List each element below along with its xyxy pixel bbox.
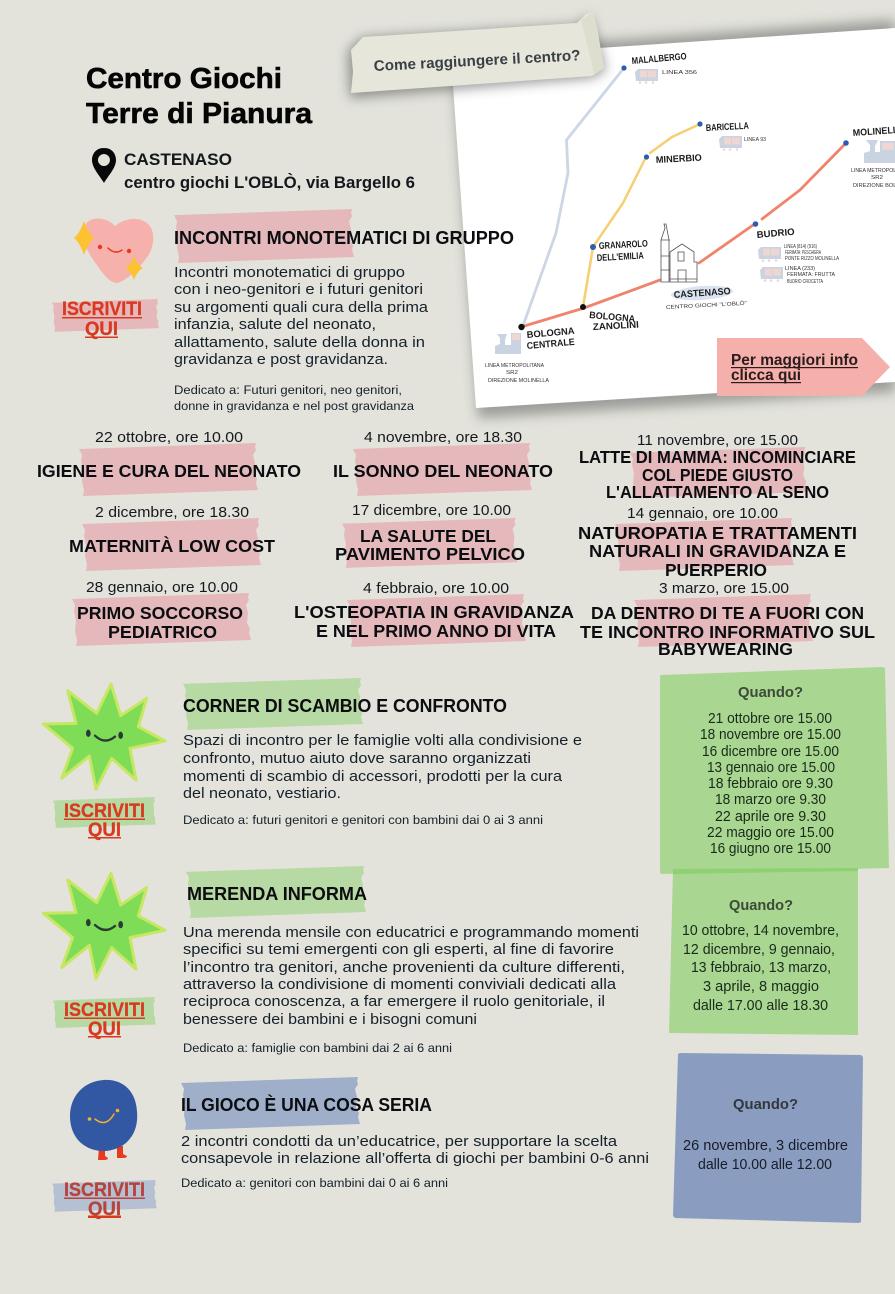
link: iscriviti qui: ISCRIVITI bbox=[64, 801, 145, 822]
event: maternità low cost bbox=[69, 504, 275, 571]
card: quando corner bbox=[660, 667, 889, 874]
card: quando corner: 22 aprile ore 9.30 bbox=[715, 809, 826, 825]
event: il sonno: IL SONNO DEL NEONATO bbox=[333, 461, 553, 481]
description bbox=[174, 264, 429, 368]
tape label: Come raggiungere il centro? bbox=[348, 12, 606, 98]
event: babywearing: TE INCONTRO INFORMATIVO SUL bbox=[580, 622, 875, 642]
map: church illustration bbox=[661, 224, 697, 282]
event: latte di mamma: LATTE DI MAMMA: INCOMINCIARE bbox=[579, 447, 856, 467]
map: hand-written labels: LINEA 356 bbox=[662, 70, 697, 76]
description: specifici su temi emergenti con gli esperti, al fine di favorire bbox=[183, 941, 614, 958]
map: hand-written labels: CENTRO GIOCHI "L'OBLÒ" bbox=[666, 300, 747, 311]
description: Spazi di incontro per le famiglie volti alla condivisione e bbox=[183, 732, 582, 749]
event: naturopatia bbox=[578, 505, 857, 580]
card: quando merenda bbox=[669, 868, 858, 1035]
heading: MERENDA INFORMA bbox=[187, 884, 367, 904]
map: hand-written labels: BOLOGNA bbox=[526, 326, 575, 341]
event: osteopatia bbox=[294, 580, 574, 647]
description: 2 incontri condotti da un’educatrice, per supportare la scelta bbox=[181, 1133, 618, 1150]
heading bbox=[183, 678, 507, 730]
event: pavimento pelvico: PAVIMENTO PELVICO bbox=[335, 544, 525, 564]
link: iscriviti qui: ISCRIVITI bbox=[62, 299, 142, 320]
icon: green star bbox=[43, 684, 165, 789]
event: naturopatia: 14 gennaio, ore 10.00 bbox=[627, 505, 778, 522]
map: hand-written labels: FERMATA: PESCHIERA bbox=[785, 250, 821, 256]
address: CASTENASO bbox=[124, 151, 232, 169]
event: naturopatia: NATURALI IN GRAVIDANZA E bbox=[589, 541, 846, 561]
card: quando merenda: dalle 17.00 alle 18.30 bbox=[693, 998, 828, 1014]
event: maternità low cost: 2 dicembre, ore 18.30 bbox=[95, 504, 249, 521]
map: hand-written labels: LINEA 93 bbox=[744, 137, 766, 143]
event: babywearing bbox=[580, 580, 875, 659]
button: Per maggiori info: clicca qui bbox=[731, 367, 801, 384]
event: latte di mamma: L'ALLATTAMENTO AL SENO bbox=[606, 482, 829, 502]
map: highlight behind Castenaso bbox=[671, 284, 733, 302]
link: iscriviti qui: ISCRIVITI bbox=[64, 1000, 145, 1021]
icon: location pin bbox=[92, 148, 116, 183]
card: quando merenda: Quando? bbox=[729, 898, 793, 914]
event: osteopatia: E NEL PRIMO ANNO DI VITA bbox=[316, 621, 556, 641]
map: hand-written labels: DELL'EMILIA bbox=[597, 251, 644, 264]
card: quando corner: Quando? bbox=[738, 685, 803, 701]
link: iscriviti qui: ISCRIVITI bbox=[64, 1180, 145, 1201]
description bbox=[183, 924, 639, 1028]
audience note: donne in gravidanza e nel post gravidanza bbox=[174, 399, 414, 413]
map: hand-written labels: SR2 bbox=[871, 175, 883, 181]
event: latte di mamma: COL PIEDE GIUSTO bbox=[642, 465, 793, 485]
audience note: Dedicato a: futuri genitori e genitori con bambini dai 0 ai 3 anni bbox=[183, 813, 543, 827]
event: pavimento pelvico: LA SALUTE DEL bbox=[360, 526, 496, 546]
description: con i neo-genitori e i futuri genitori bbox=[174, 281, 423, 298]
icon: green star bbox=[43, 873, 165, 979]
map: hand-written labels: BUDRIO CROCETTA bbox=[787, 279, 823, 285]
map: blue line to Malalbergo bbox=[524, 68, 624, 323]
audience note: Dedicato a: Futuri genitori, neo genitori, bbox=[174, 383, 402, 397]
card: quando gioco bbox=[673, 1053, 863, 1223]
heading bbox=[181, 1077, 432, 1130]
event: igiene e cura bbox=[37, 429, 301, 496]
card: quando merenda: 3 aprile, 8 maggio bbox=[703, 979, 819, 995]
description: momenti di scambio di accessori, prodotti per la cura bbox=[183, 768, 563, 785]
link: iscriviti qui: QUI bbox=[85, 319, 118, 340]
map: train icons bbox=[495, 69, 895, 354]
event: latte di mamma bbox=[579, 432, 856, 502]
description: allattamento, salute della donna in bbox=[174, 334, 425, 351]
map: hand-written labels: SR2 bbox=[506, 370, 518, 376]
address bbox=[124, 151, 415, 192]
card: quando corner: 18 febbraio ore 9.30 bbox=[708, 776, 833, 792]
event: primo soccorso bbox=[72, 579, 251, 646]
card: quando corner: 21 ottobre ore 15.00 bbox=[708, 711, 832, 727]
card: quando corner: 13 gennaio ore 15.00 bbox=[707, 760, 835, 776]
event: igiene e cura: 22 ottobre, ore 10.00 bbox=[95, 429, 243, 446]
button: Per maggiori info: Per maggiori info bbox=[731, 352, 858, 369]
description: benessere dei bambini e i bisogni comuni bbox=[183, 1011, 477, 1028]
card: quando gioco: dalle 10.00 alle 12.00 bbox=[698, 1157, 832, 1173]
map: hand-written labels bbox=[485, 51, 895, 384]
title: Terre di Pianura bbox=[86, 98, 313, 130]
card: quando corner: 18 novembre ore 15.00 bbox=[700, 727, 841, 743]
tape label: Come raggiungere il centro?: Come raggiungere il centro? bbox=[373, 47, 581, 75]
event: babywearing: DA DENTRO DI TE A FUORI CON bbox=[591, 603, 864, 623]
address: centro giochi L'OBLÒ, via Bargello 6 bbox=[124, 173, 415, 192]
button: Per maggiori info bbox=[717, 338, 890, 396]
audience note: Dedicato a: famiglie con bambini dai 2 ai 6 anni bbox=[183, 1041, 452, 1055]
map: hand-written labels: LINEA (814) (916) bbox=[784, 244, 817, 250]
map: hand-written labels: PONTE RIZZO MOLINELLA bbox=[785, 256, 839, 262]
description: confronto, mutuo aiuto dove saranno organizzati bbox=[183, 750, 531, 767]
card: quando merenda: 12 dicembre, 9 gennaio, bbox=[683, 942, 835, 958]
link: iscriviti qui: QUI bbox=[88, 1199, 121, 1220]
icon: blue blob character bbox=[70, 1080, 137, 1160]
event: il sonno: 4 novembre, ore 18.30 bbox=[364, 429, 522, 446]
map: red line to Molinella bbox=[521, 143, 846, 327]
link: iscriviti qui bbox=[53, 797, 156, 841]
panel: il gioco è una cosa seria bbox=[52, 1077, 649, 1220]
card: quando merenda: 13 febbraio, 13 marzo, bbox=[691, 960, 831, 976]
description bbox=[183, 732, 582, 802]
map: hand-written labels: LINEA METROPOLITANA bbox=[485, 363, 544, 369]
description: reciproca conoscenza, a far emergere il ruolo genitoriale, il bbox=[183, 993, 605, 1010]
description: Incontri monotematici di gruppo bbox=[174, 264, 405, 281]
link: iscriviti qui bbox=[52, 1180, 157, 1220]
map: hand-written labels: ZANOLINI bbox=[593, 320, 639, 333]
link: iscriviti qui: QUI bbox=[88, 820, 121, 841]
event: babywearing: 3 marzo, ore 15.00 bbox=[659, 580, 789, 597]
event: primo soccorso: PRIMO SOCCORSO bbox=[77, 603, 243, 623]
link: iscriviti qui bbox=[52, 299, 159, 340]
map: yellow line to Baricella bbox=[583, 124, 700, 307]
panel: schedule of meetings bbox=[37, 429, 875, 659]
map: station dots bbox=[518, 65, 849, 330]
card: quando gioco: Quando? bbox=[733, 1097, 798, 1113]
heading bbox=[174, 209, 514, 263]
card: quando corner: 22 maggio ore 15.00 bbox=[707, 825, 834, 841]
event: naturopatia: NATUROPATIA E TRATTAMENTI bbox=[578, 523, 857, 543]
event: osteopatia: L'OSTEOPATIA IN GRAVIDANZA bbox=[294, 602, 574, 622]
card: quando corner: 16 dicembre ore 15.00 bbox=[702, 744, 839, 760]
title bbox=[86, 63, 313, 130]
map: hand-written labels: CENTRALE bbox=[526, 337, 575, 352]
event: osteopatia: 4 febbraio, ore 10.00 bbox=[363, 580, 509, 597]
description: consapevole in relazione all’offerta di giochi per bambini 0-6 anni bbox=[181, 1150, 649, 1167]
title: Centro Giochi bbox=[86, 63, 282, 95]
description: infanzia, salute del neonato, bbox=[174, 316, 376, 333]
map: hand-written labels: BARICELLA bbox=[706, 121, 749, 134]
description: su argomenti quali cura della prima bbox=[174, 299, 429, 316]
link: iscriviti qui bbox=[53, 997, 156, 1040]
description: del neonato, vestiario. bbox=[183, 785, 341, 802]
card: quando merenda: 10 ottobre, 14 novembre, bbox=[682, 923, 839, 939]
description bbox=[181, 1133, 649, 1167]
card: quando corner: 16 giugno ore 15.00 bbox=[710, 841, 831, 857]
map: hand-written labels: BOLOGNA bbox=[589, 310, 636, 325]
panel: merenda informa bbox=[43, 866, 639, 1055]
heading: INCONTRI MONOTEMATICI DI GRUPPO bbox=[174, 228, 514, 248]
event: babywearing: BABYWEARING bbox=[658, 639, 793, 659]
card: quando gioco: 26 novembre, 3 dicembre bbox=[683, 1138, 848, 1154]
heading: IL GIOCO È UNA COSA SERIA bbox=[181, 1094, 432, 1115]
event: primo soccorso: 28 gennaio, ore 10.00 bbox=[86, 579, 238, 596]
link: iscriviti qui: QUI bbox=[88, 1019, 121, 1040]
description: Una merenda mensile con educatrici e programmando momenti bbox=[183, 924, 639, 941]
heading: CORNER DI SCAMBIO E CONFRONTO bbox=[183, 696, 507, 716]
panel: route map bbox=[451, 20, 895, 418]
card: quando corner: 18 marzo ore 9.30 bbox=[715, 792, 826, 808]
audience note: Dedicato a: genitori con bambini dai 0 ai 6 anni bbox=[181, 1176, 448, 1190]
panel: incontri monotematici bbox=[52, 209, 514, 413]
heading bbox=[186, 866, 367, 918]
map: hand-written labels: MALALBERGO bbox=[631, 51, 687, 67]
audience note bbox=[174, 383, 414, 413]
event: pavimento pelvico bbox=[335, 502, 525, 568]
map: hand-written labels: DIREZIONE MOLINELLA bbox=[488, 378, 549, 384]
map: hand-written labels: MINERBIO bbox=[656, 153, 702, 166]
event: naturopatia: PUERPERIO bbox=[665, 560, 767, 580]
event: primo soccorso: PEDIATRICO bbox=[108, 622, 217, 642]
event: il sonno bbox=[333, 429, 553, 496]
map: hand-written labels: CASTENASO bbox=[673, 286, 731, 301]
event: maternità low cost: MATERNITÀ LOW COST bbox=[69, 535, 275, 556]
map: hand-written labels: FERMATA: FRUTTA bbox=[787, 272, 835, 278]
map paper bbox=[451, 28, 895, 408]
map: hand-written labels: LINEA (233) bbox=[785, 266, 815, 272]
event: igiene e cura: IGIENE E CURA DEL NEONATO bbox=[37, 461, 301, 481]
event: pavimento pelvico: 17 dicembre, ore 10.00 bbox=[352, 502, 511, 519]
event: latte di mamma: 11 novembre, ore 15.00 bbox=[637, 432, 798, 449]
icon: smiling heart bbox=[74, 218, 153, 283]
description: l’incontro tra genitori, anche provenienti da culture differenti, bbox=[183, 959, 625, 976]
map: hand-written labels: GRANAROLO bbox=[599, 238, 648, 252]
map: hand-written labels: BUDRIO bbox=[756, 227, 795, 241]
panel: corner di scambio bbox=[43, 678, 582, 841]
description: attraverso la condivisione di momenti conviviali dedicati alla bbox=[183, 976, 617, 993]
description: gravidanza e post gravidanza. bbox=[174, 351, 388, 368]
